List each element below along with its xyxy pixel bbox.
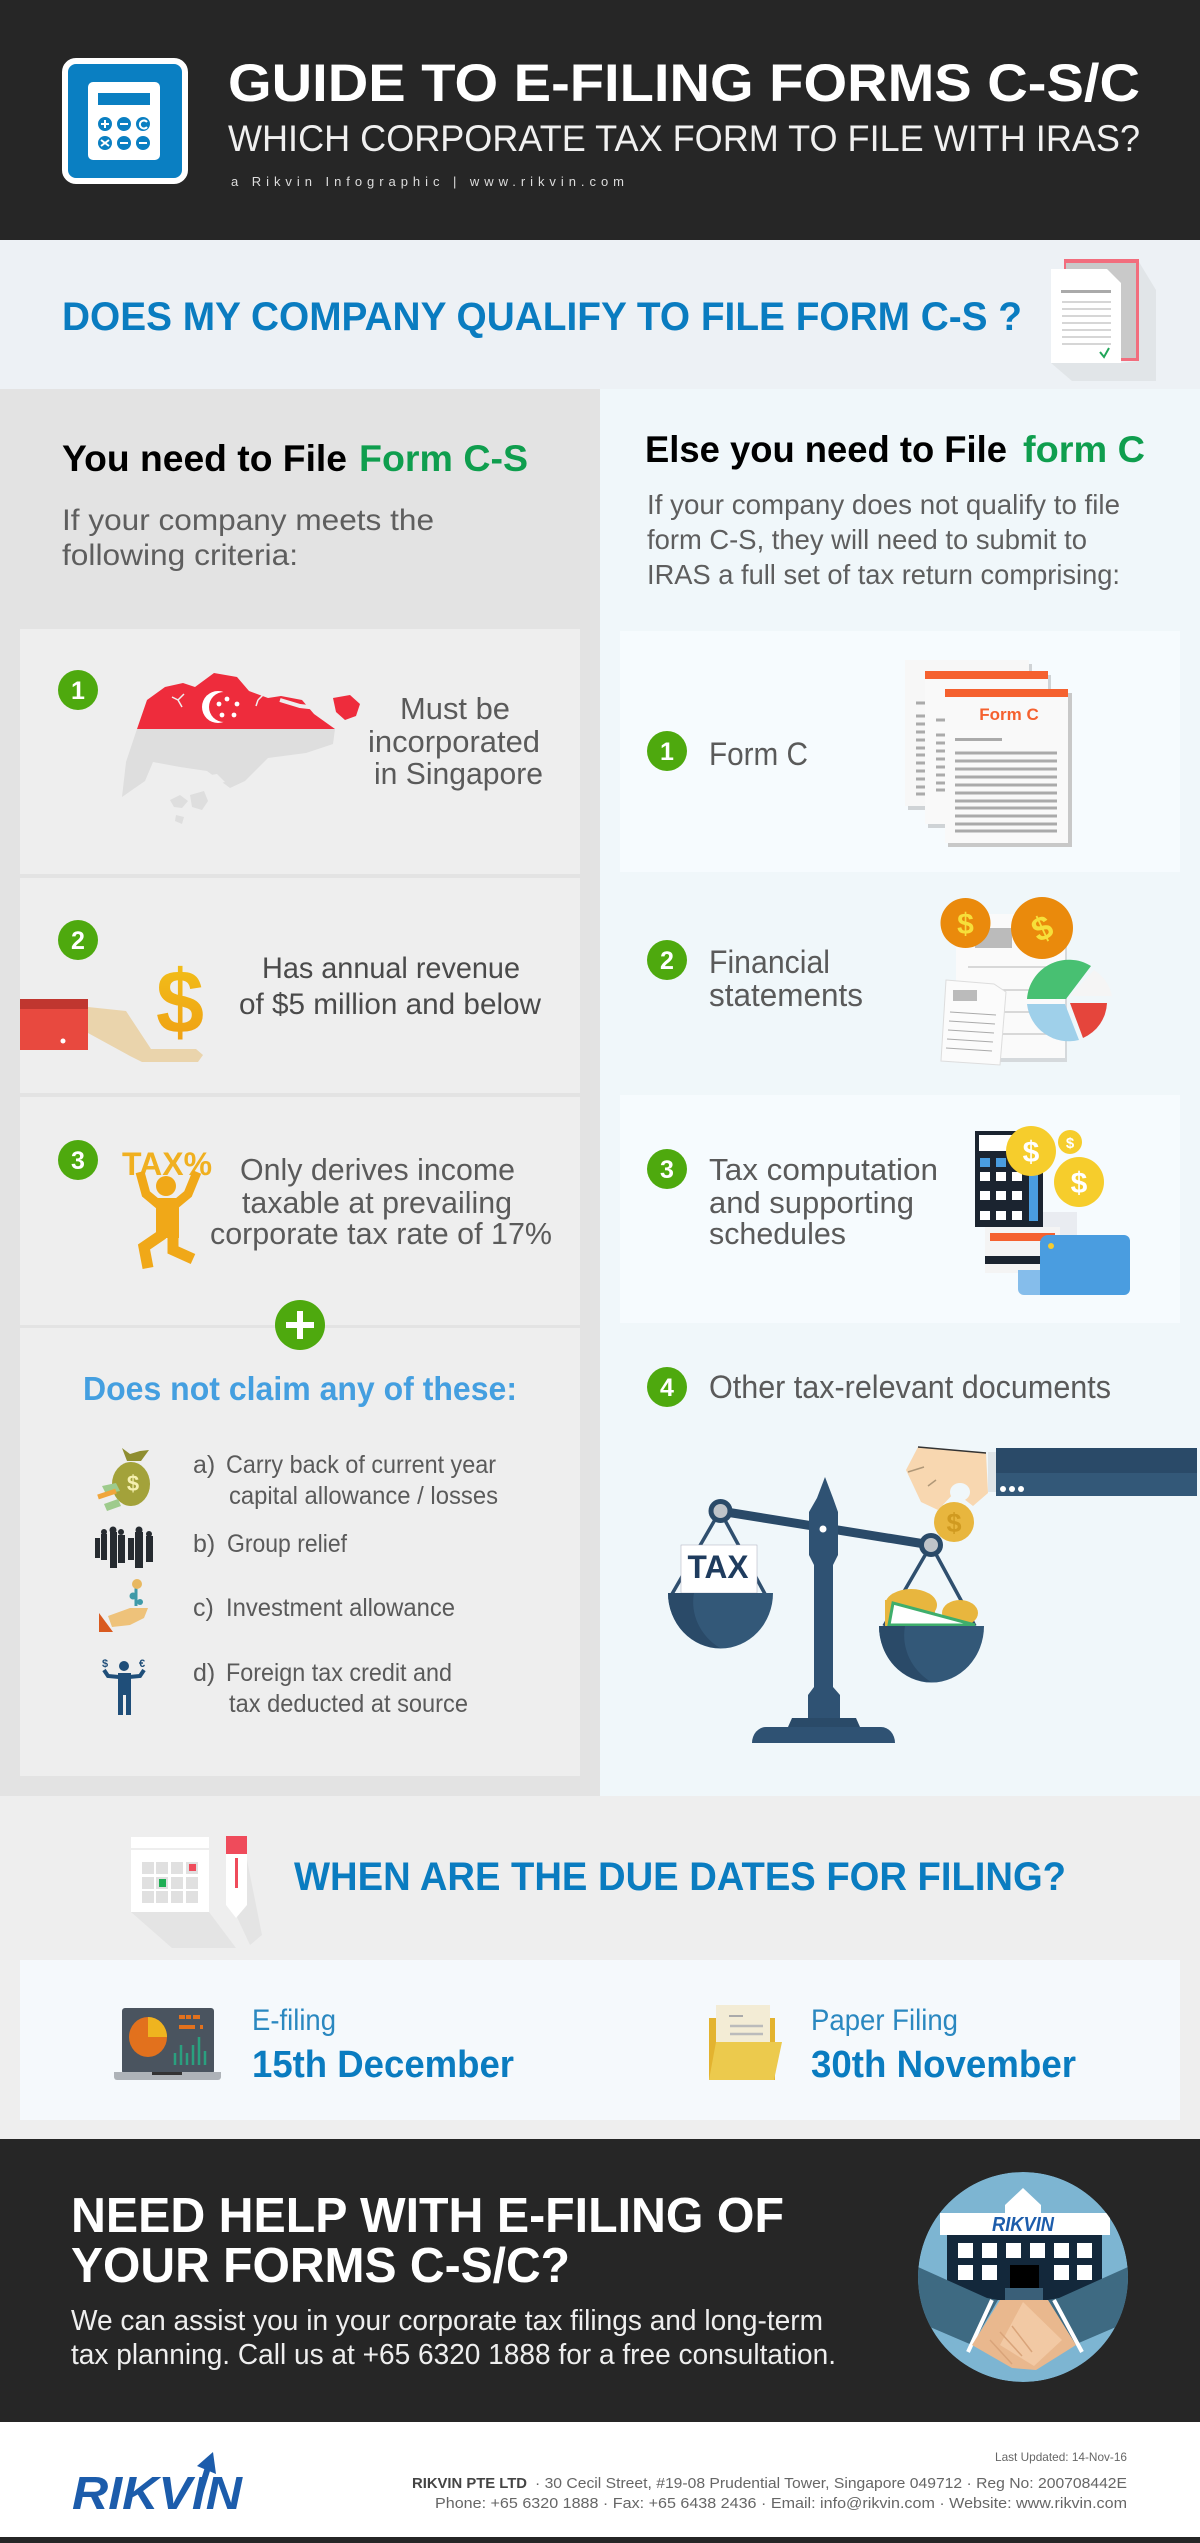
- text: e-filing: E-filing: [252, 2004, 336, 2037]
- badge 1: [647, 731, 687, 771]
- icon: building and handshake: RIKVIN: [992, 2214, 1054, 2236]
- icon: person lifting tax: [122, 1146, 212, 1268]
- text: assistance: We can assist you in your corporate tax filings and long-term: [71, 2305, 823, 2337]
- question heading: DOES MY COMPANY QUALIFY TO FILE FORM C-S ?: [62, 295, 1022, 339]
- item c: c): [193, 1594, 214, 1622]
- card: item 3 tax computation: [620, 1095, 1180, 1323]
- panel: call to action: [0, 2139, 1200, 2422]
- icon: building and handshake: [915, 2172, 1131, 2382]
- text: incorporated: in Singapore: [374, 756, 543, 791]
- icon: man with currencies: €: [139, 1658, 145, 1670]
- text: incorporated: [368, 691, 543, 791]
- heading: need form C-S: [62, 438, 528, 479]
- intro text: [647, 489, 1120, 590]
- icon: hand with plant: [99, 1579, 148, 1632]
- byline: a Rikvin Infographic | www.rikvin.com: [231, 174, 624, 189]
- text: incorporated: incorporated: [368, 724, 540, 759]
- question banner: [0, 240, 1200, 389]
- item a: [193, 1451, 498, 1510]
- text: other documents: Other tax-relevant documents: [709, 1369, 1111, 1405]
- badge 4: [647, 1367, 687, 1407]
- icon: calculator and wallet: $: [1066, 1135, 1075, 1152]
- text: assistance: tax planning. Call us at +65 6320 1888 for a free consultation.: [71, 2339, 836, 2371]
- badge 3: 3: [71, 1147, 85, 1175]
- badge 2: 2: [660, 947, 674, 975]
- card: criterion 1: [20, 629, 580, 874]
- text: tax computation: [709, 1152, 938, 1251]
- icon: financial documents: $: [957, 908, 974, 941]
- text: tax rate: corporate tax rate of 17%: [210, 1216, 552, 1251]
- text: financial statements: [709, 944, 863, 1013]
- icon: financial documents: [940, 897, 1112, 1065]
- item a: capital allowance / losses: [229, 1482, 498, 1510]
- badge 2: [647, 940, 687, 980]
- text: tax computation: Tax computation: [709, 1152, 938, 1187]
- intro text: form C-S, they will need to submit to: [647, 524, 1087, 555]
- text: assistance: [71, 2305, 836, 2371]
- icon: calculator and wallet: $: [1071, 1167, 1088, 1200]
- text: tax rate: taxable at prevailing: [242, 1185, 512, 1220]
- subtitle: WHICH CORPORATE TAX FORM TO FILE WITH IRAS?: [228, 118, 1140, 159]
- text: paper filing: 30th November: [811, 2044, 1076, 2086]
- icon: group of people: [95, 1526, 153, 1568]
- item d: d): [193, 1659, 215, 1687]
- icon: calculator: [65, 61, 185, 181]
- card: dates: [20, 1960, 1180, 2120]
- badge 3: [58, 1140, 98, 1180]
- card: criterion 2: [20, 878, 580, 1093]
- text: tax rate: Only derives income: [240, 1152, 515, 1187]
- card: item 1 form C: [620, 631, 1180, 872]
- icon: man with currencies: [102, 1658, 145, 1715]
- icon: man with currencies: $: [102, 1658, 108, 1670]
- text: incorporated: Must be: [400, 691, 510, 726]
- pan with tax: TAX: [688, 1549, 749, 1585]
- heading: need help: NEED HELP WITH E-FILING OF: [71, 2189, 784, 2243]
- text: paper filing: Paper Filing: [811, 2004, 958, 2037]
- panel: footer: [0, 2422, 1200, 2537]
- text: tax computation: and supporting: [709, 1185, 914, 1220]
- pan with money: [879, 1502, 984, 1683]
- company details: [412, 2475, 1127, 2512]
- intro text: If your company meets the: [62, 504, 434, 537]
- badge 1: 1: [660, 738, 674, 766]
- panel: due dates: [0, 1796, 1200, 2140]
- logo: Rikvin: RIKVIN: [72, 2467, 243, 2519]
- text: e-filing: 15th December: [252, 2044, 514, 2086]
- icon: forms stack: [905, 660, 1072, 847]
- text: revenue: Has annual revenue: [262, 952, 520, 985]
- due dates heading: WHEN ARE THE DUE DATES FOR FILING?: [294, 1855, 1066, 1899]
- card: criterion 3: [20, 1097, 580, 1325]
- heading: does not claim: Does not claim any of these:: [83, 1370, 517, 1407]
- icon: document: [1051, 259, 1156, 381]
- text: tax computation: schedules: [709, 1216, 846, 1251]
- badge 4: 4: [660, 1374, 674, 1402]
- panel: form C-S column: [0, 389, 600, 1796]
- item b: Group relief: [227, 1530, 347, 1558]
- badge 1: 1: [71, 677, 85, 705]
- badge 1: [58, 670, 98, 710]
- text: paper filing: [811, 2004, 1076, 2086]
- icon: hand with dollar: [20, 953, 204, 1062]
- icon: calculator and wallet: $: [1023, 1136, 1040, 1169]
- text: financial statements: Financial: [709, 944, 830, 980]
- badge 2: 2: [71, 927, 85, 955]
- panel: form C column: [600, 389, 1200, 1796]
- text: revenue: of $5 million and below: [239, 988, 541, 1021]
- icon: calculator and wallet: [975, 1126, 1130, 1295]
- item a: Carry back of current year: [226, 1451, 496, 1479]
- item d: Foreign tax credit and: [226, 1659, 452, 1687]
- header banner: [0, 0, 1200, 240]
- icon: plus: [275, 1300, 325, 1350]
- item a: a): [193, 1451, 215, 1479]
- intro text: If your company does not qualify to file: [647, 489, 1120, 520]
- heading: need form C-S: Form C-S: [359, 438, 528, 479]
- heading: need help: YOUR FORMS C-S/C?: [71, 2239, 570, 2293]
- icon: Singapore map: [122, 673, 360, 824]
- icon: calendar and pencil: [131, 1836, 262, 1948]
- icon: forms stack: Form C: [979, 705, 1039, 724]
- text: tax rate: [210, 1152, 552, 1251]
- icon: money bag: $: [127, 1471, 139, 1496]
- heading: need form C: Else you need to File: [645, 429, 1007, 470]
- item 2 financial statements: [647, 897, 1112, 1065]
- company details: Phone: +65 6320 1888 · Fax: +65 6438 2436 · Email: info@rikvin.com · Website: www.rikvin.com: [435, 2495, 1127, 2512]
- badge 3: 3: [660, 1156, 674, 1184]
- item d: [193, 1659, 468, 1718]
- title: GUIDE TO E-FILING FORMS C-S/C: [228, 54, 1140, 113]
- badge 3: [647, 1149, 687, 1189]
- pan with tax: [668, 1499, 773, 1649]
- item d: tax deducted at source: [229, 1690, 468, 1718]
- bottom bar: [0, 2537, 1200, 2543]
- company details: · 30 Cecil Street, #19-08 Prudential Tower, Singapore 049712 · Reg No: 200708442E: [535, 2475, 1127, 2492]
- text: e-filing: [252, 2004, 514, 2086]
- last updated: Last Updated: 14-Nov-16: [995, 2450, 1127, 2464]
- intro text: IRAS a full set of tax return comprising:: [647, 559, 1120, 590]
- icon: hand with dollar: $: [156, 953, 204, 1053]
- item b: b): [193, 1530, 215, 1558]
- text: form C: Form C: [709, 736, 808, 772]
- card: does not claim: [20, 1300, 580, 1776]
- item 4 other documents: [647, 1367, 1197, 1743]
- company details: RIKVIN PTE LTD: [412, 2475, 527, 2492]
- pan with money: $: [946, 1508, 962, 1538]
- item c: Investment allowance: [226, 1594, 455, 1622]
- heading: need form C-S: You need to File: [62, 438, 347, 479]
- text: revenue: [239, 952, 541, 1021]
- icon: money bag: [98, 1448, 150, 1511]
- icon: financial documents: $: [1026, 908, 1059, 950]
- intro text: following criteria:: [62, 539, 298, 572]
- heading: need help: [71, 2189, 784, 2293]
- icon: laptop: [114, 2008, 221, 2080]
- icon: folder: [709, 2005, 782, 2080]
- icon: balance scale: [668, 1447, 1197, 1743]
- heading: need form C: form C: [1023, 429, 1145, 470]
- intro text: [62, 504, 434, 572]
- hand with coin: [906, 1447, 1197, 1510]
- badge 2: [58, 920, 98, 960]
- icon: person lifting tax: TAX%: [122, 1146, 212, 1182]
- text: financial statements: statements: [709, 977, 863, 1013]
